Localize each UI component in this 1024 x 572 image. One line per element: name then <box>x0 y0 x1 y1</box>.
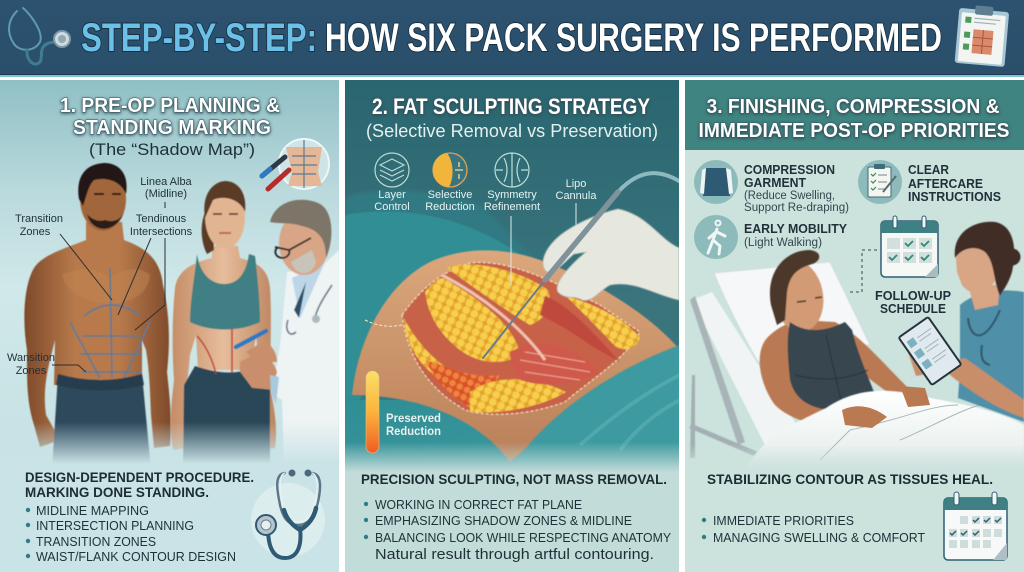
labels: technique icons: Reduction <box>425 201 475 213</box>
cannula and tube <box>483 173 679 358</box>
panel: finishing and post-op priorities <box>685 80 1024 572</box>
preserved to reduction gradient bar: Preserved <box>386 413 441 425</box>
fade: lower bed <box>685 444 1024 470</box>
heading: panel 3: IMMEDIATE POST-OP PRIORITIES <box>698 120 1010 142</box>
labels: anatomy: Transition <box>15 213 63 225</box>
icon: symmetry refinement <box>495 153 529 187</box>
labels: technique icons: Refinement <box>484 201 540 213</box>
text: design-dependent summary: WAIST/FLANK CONTOUR DESIGN <box>36 549 236 564</box>
text: stabilizing contour summary: IMMEDIATE PRIORITIES <box>713 513 854 528</box>
labels: technique icons <box>374 179 596 210</box>
heading: panel 3 <box>698 96 1010 142</box>
labels: anatomy: Tendinous <box>136 213 187 225</box>
text: compression garment: GARMENT <box>744 176 806 190</box>
heading: panel 1: (The “Shadow Map”) <box>89 140 255 159</box>
preserved to reduction gradient bar <box>366 371 441 453</box>
icon: layer control <box>375 153 409 187</box>
thumb over handle <box>592 222 634 258</box>
woman's teal sports top <box>190 254 260 330</box>
labels: anatomy: Intersections <box>130 226 193 238</box>
icon: compression garment <box>694 160 738 204</box>
nurse <box>908 222 1024 422</box>
text: design-dependent summary: DESIGN-DEPENDENT PROCEDURE. <box>25 469 254 485</box>
text: clear aftercare instructions: INSTRUCTIONS <box>908 190 1001 204</box>
dashed connector <box>850 250 877 292</box>
surgical drape <box>346 191 526 254</box>
text: precision sculpting summary: BALANCING LOOK WHILE RESPECTING ANATOMY <box>375 530 671 545</box>
text: stabilizing contour summary: STABILIZING CONTOUR AS TISSUES HEAL. <box>707 471 993 487</box>
gloved hand <box>543 209 679 300</box>
text: compression garment: COMPRESSION <box>744 163 835 177</box>
text: compression garment: (Reduce Swelling, <box>744 190 835 202</box>
text: precision sculpting summary: Natural result through artful contouring. <box>375 547 654 563</box>
pillow <box>714 262 870 362</box>
icon: calendar <box>944 492 1007 560</box>
patient resting <box>760 250 912 428</box>
text: design-dependent summary: MIDLINE MAPPING <box>36 503 149 518</box>
labels: anatomy: Wansition <box>7 352 55 364</box>
text: early mobility: EARLY MOBILITY <box>744 222 848 236</box>
labels: anatomy: (Midline) <box>145 188 187 200</box>
text: clear aftercare instructions <box>908 165 1000 201</box>
icon: clipboard <box>955 4 1010 67</box>
hand and marker pen <box>240 356 277 390</box>
text: clear aftercare instructions: AFTERCARE <box>908 177 983 191</box>
text: compression garment <box>744 163 849 214</box>
text: design-dependent summary: MARKING DONE STANDING. <box>25 484 209 500</box>
heading: panel 2 <box>366 94 658 141</box>
lower right drape fold <box>522 345 679 452</box>
labels: technique icons: Cannula <box>556 190 597 202</box>
text: design-dependent summary: TRANSITION ZONES <box>36 534 156 549</box>
tablet <box>899 317 961 385</box>
labels: technique icons: Lipo <box>566 178 586 190</box>
woman's leggings <box>183 366 270 470</box>
header banner <box>0 0 1024 77</box>
heading: panel 1: STANDING MARKING <box>73 117 271 139</box>
labels: technique icons: Symmetry <box>487 189 537 201</box>
text: early mobility: (Light Walking) <box>744 237 822 249</box>
text: clear aftercare instructions: CLEAR <box>908 163 949 177</box>
fade: lower figures <box>34 424 339 464</box>
callout lines <box>52 202 165 372</box>
labels: anatomy: Zones <box>20 226 51 238</box>
icon: follow-up calendar <box>881 216 938 277</box>
patient's compression vest <box>788 322 876 410</box>
label: follow-up schedule: FOLLOW-UP <box>875 289 951 303</box>
figure: male patient <box>24 163 171 470</box>
hospital bed frame <box>689 292 800 462</box>
callout lines <box>511 203 576 285</box>
bed sheet <box>745 391 1024 470</box>
label: follow-up schedule: SCHEDULE <box>880 302 946 316</box>
text: stabilizing contour summary <box>702 471 993 545</box>
patient's hands <box>842 406 887 428</box>
icon: stethoscope <box>251 470 325 558</box>
text: precision sculpting summary <box>361 471 671 563</box>
icon: aftercare clipboard <box>858 160 902 204</box>
panel: fat sculpting strategy <box>345 80 680 572</box>
text: precision sculpting summary: EMPHASIZING SHADOW ZONES & MIDLINE <box>375 513 632 528</box>
man's shorts <box>52 375 150 462</box>
heading: panel 1 <box>60 95 280 159</box>
icon: early mobility <box>694 215 738 259</box>
text: compression garment: Support Re-draping) <box>744 202 849 214</box>
labels: technique icons: Selective <box>428 189 472 201</box>
heading: panel 1: 1. PRE-OP PLANNING & <box>60 95 280 117</box>
icon: header stethoscope <box>9 8 70 64</box>
labels: anatomy <box>7 176 193 377</box>
text: early mobility <box>744 224 847 248</box>
labels: technique icons: Control <box>374 201 410 213</box>
labels: anatomy: Linea Alba <box>140 176 193 188</box>
figure: doctor marking with pen <box>236 200 339 470</box>
preserved to reduction gradient bar: Reduction <box>386 426 441 438</box>
title <box>81 16 942 60</box>
labels: anatomy: Zones <box>16 365 47 377</box>
heading: panel 2: 2. FAT SCULPTING STRATEGY <box>372 94 650 119</box>
heading: panel 2: (Selective Removal vs Preservation) <box>366 121 658 141</box>
text: precision sculpting summary: PRECISION SCULPTING, NOT MASS REMOVAL. <box>361 471 667 487</box>
title: STEP-BY-STEP: <box>81 16 317 60</box>
label: follow-up schedule <box>875 289 951 316</box>
text: design-dependent summary: INTERSECTION PLANNING <box>36 518 194 533</box>
fade: lower panel <box>345 442 679 472</box>
heading: panel 3: 3. FINISHING, COMPRESSION & <box>706 96 1000 118</box>
panel: pre-op planning <box>0 80 339 572</box>
icon: marked abdomen inset with pens <box>262 139 329 189</box>
incision layers <box>402 262 640 414</box>
patient skin <box>352 250 680 462</box>
icon: selective reduction <box>433 153 467 187</box>
labels: technique icons: Layer <box>378 189 406 201</box>
figure: female patient <box>171 181 276 470</box>
text: design-dependent summary <box>25 469 254 564</box>
text: precision sculpting summary: WORKING IN CORRECT FAT PLANE <box>375 497 582 512</box>
text: stabilizing contour summary: MANAGING SWELLING & COMFORT <box>713 530 925 545</box>
